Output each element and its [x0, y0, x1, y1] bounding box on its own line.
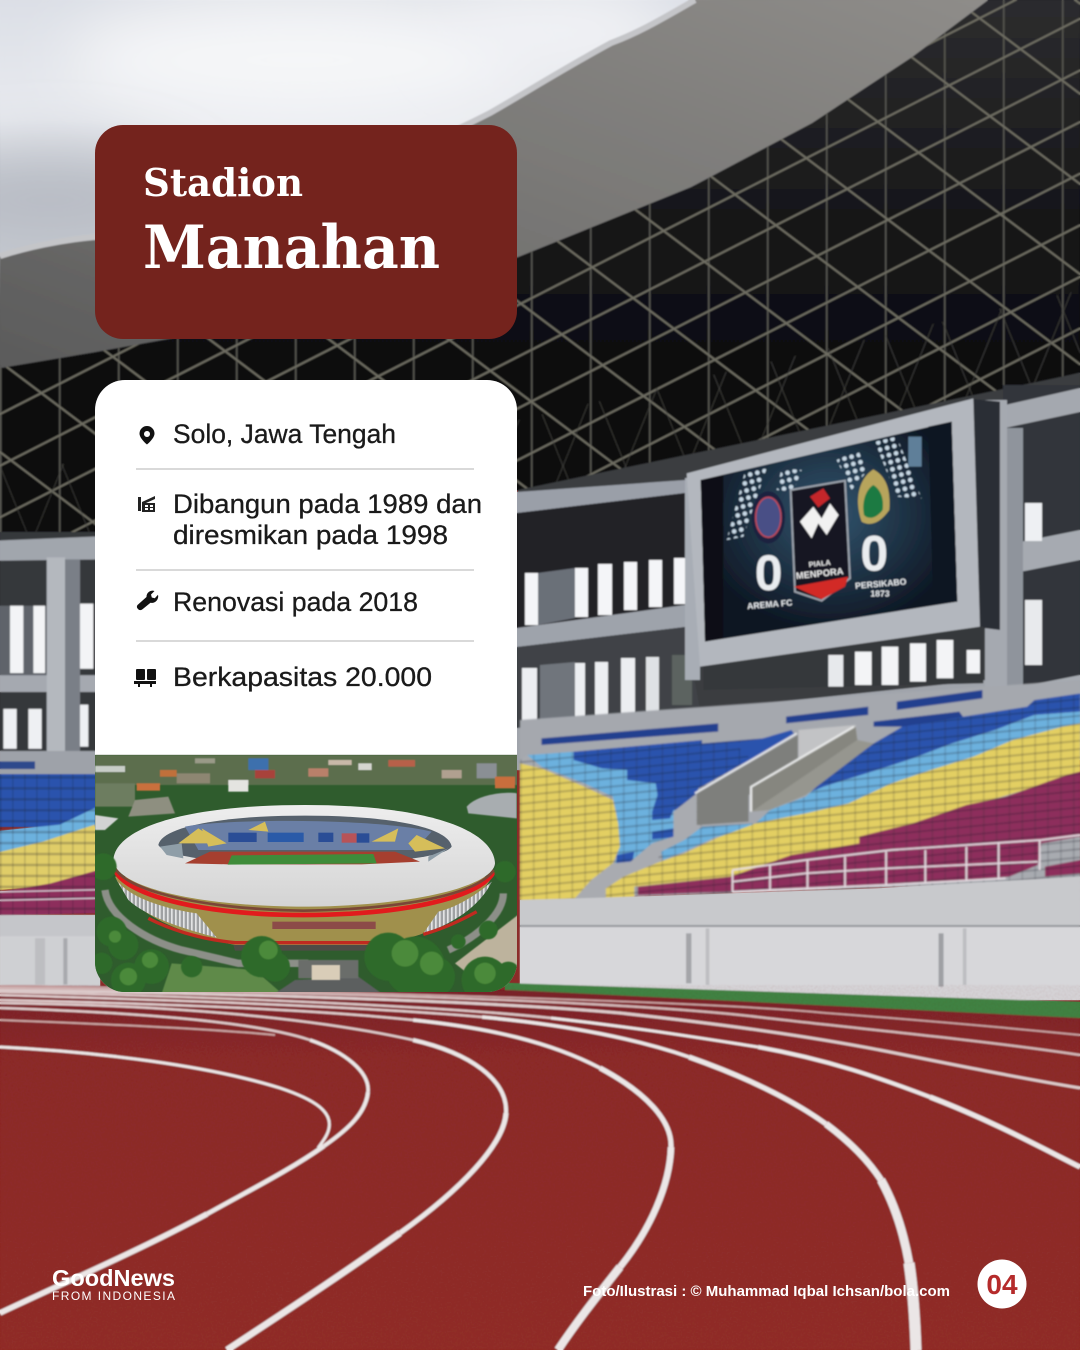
railing — [732, 835, 1080, 892]
score and team names: AREMA FC — [747, 597, 793, 611]
left stand behind the cards — [0, 532, 100, 989]
icon: building under construction — [138, 496, 155, 512]
stadium lights on screen — [727, 437, 922, 540]
lane lines — [0, 986, 1080, 1350]
team crest: Persikabo — [858, 469, 890, 524]
info row: built: Dibangun pada 1989 dan — [173, 489, 482, 519]
info row: built: diresmikan pada 1998 — [173, 520, 448, 550]
footer logo: GoodNews from Indonesia — [52, 1265, 175, 1303]
info card — [90, 380, 520, 1003]
grass strip — [505, 983, 1080, 1020]
building right of the screen — [1003, 385, 1080, 695]
aerial photo of the stadium — [90, 755, 520, 1003]
town behind the stadium — [95, 755, 520, 785]
icon: map pin — [140, 426, 154, 444]
photo credit: Foto/Ilustrasi : © Muhammad Iqbal Ichsan/bola.com — [583, 1284, 950, 1300]
stadium body — [115, 877, 492, 951]
info row: capacity: Berkapasitas 20.000 — [173, 662, 432, 692]
sky — [0, 0, 1080, 400]
score and team names: 0 — [860, 526, 888, 582]
tournament emblem — [791, 481, 850, 601]
title panel — [95, 125, 517, 339]
back row strips — [541, 723, 718, 745]
score and team names — [747, 526, 907, 611]
concrete stair walls — [799, 725, 857, 768]
tournament emblem: MENPORA — [795, 566, 844, 581]
page number — [978, 1260, 1026, 1308]
footer logo: GoodNews from Indonesia: FROM INDONESIA — [52, 1289, 175, 1303]
score and team names: PERSIKABO — [855, 576, 907, 591]
roof band — [0, 0, 988, 368]
right seating tiers — [520, 680, 1080, 1000]
right stand building — [517, 373, 1080, 770]
info row: location: Solo, Jawa Tengah — [173, 419, 396, 449]
team crest: Arema FC — [752, 491, 785, 543]
steel truss ceiling — [0, 0, 1080, 560]
info row: renovation: Renovasi pada 2018 — [173, 587, 418, 617]
score and team names: 0 — [755, 545, 783, 601]
page number: 04 — [986, 1269, 1018, 1300]
icon: stadium seats — [134, 669, 156, 687]
concrete parapet and lower wall — [520, 877, 1080, 1000]
scoreboard screen — [687, 398, 1000, 690]
concrete aisles — [574, 793, 702, 900]
icon: wrench — [137, 591, 158, 610]
tournament emblem: PIALA — [808, 558, 832, 569]
running track — [0, 985, 1080, 1350]
title: Manahan: Manahan — [143, 213, 440, 283]
info row: built — [138, 489, 482, 550]
stadium roof — [113, 805, 495, 915]
trees in the foreground — [90, 853, 520, 1003]
footer logo: GoodNews from Indonesia: GoodNews — [52, 1265, 175, 1291]
score and team names: 1873 — [870, 589, 890, 599]
title: Stadion: Stadion — [143, 160, 303, 205]
